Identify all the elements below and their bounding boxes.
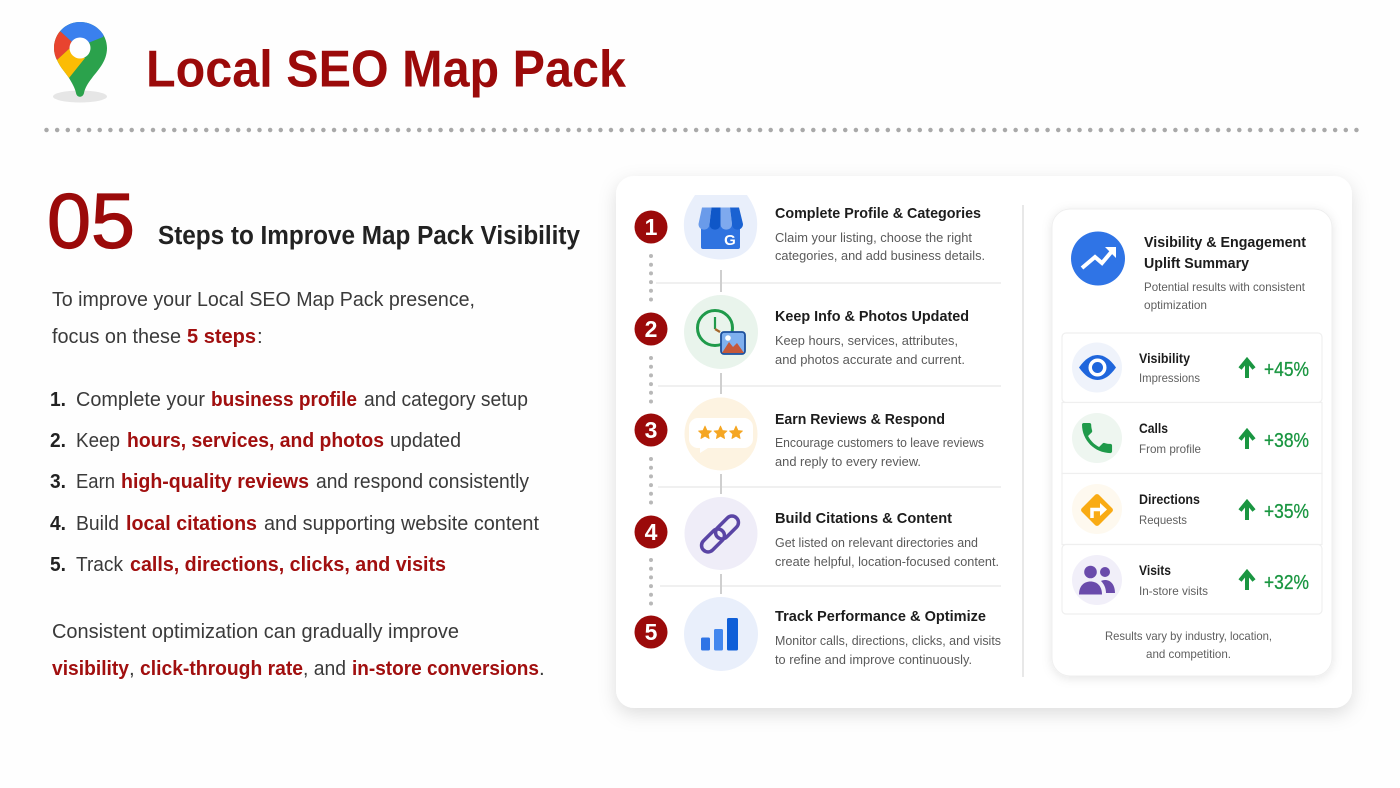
text block: introduction: 5 steps [187, 325, 256, 348]
row: directions: Requests [1139, 513, 1187, 527]
step 2 text: and photos accurate and current. [775, 352, 965, 367]
text block: introduction: : [257, 325, 263, 348]
title: Local SEO Map Pack [146, 40, 626, 98]
row: calls [1062, 402, 1322, 474]
footnote: Results vary by industry, location, [1105, 629, 1272, 643]
step 5 text [775, 608, 1001, 667]
text block: closing statement: , [129, 657, 135, 680]
list: five steps: high-quality reviews [121, 470, 309, 493]
row: visibility [1062, 333, 1322, 402]
list: five steps: calls, directions, clicks, and visits [130, 553, 446, 576]
list: five steps [50, 388, 539, 576]
number badge 3: 3 [645, 417, 657, 443]
step 2 text: Keep Info & Photos Updated [775, 308, 969, 325]
text block: closing statement: , and [303, 657, 346, 680]
step 3: earn reviews [634, 398, 984, 470]
text block: closing statement: . [539, 657, 545, 680]
text block: introduction: focus on these [52, 325, 181, 348]
list: five steps: 5. [50, 553, 66, 576]
text block: closing statement: in-store conversions [352, 657, 539, 680]
heading: 05 steps: 05 [47, 176, 135, 264]
text block: closing statement: click-through rate [140, 657, 303, 680]
list: five steps: business profile [211, 388, 357, 411]
text block: closing statement: Consistent optimization can gradually improve [52, 620, 459, 643]
step 4 text: create helpful, location-focused content. [775, 554, 999, 569]
number badge 5 [634, 616, 668, 648]
step 4 text [775, 510, 999, 569]
list: five steps: and category setup [364, 388, 528, 411]
number badge 4: 4 [645, 519, 658, 545]
number badge 3 [634, 414, 668, 446]
number badge 2 [634, 312, 668, 346]
row: directions: +35% [1264, 501, 1309, 523]
step 5 text: to refine and improve continuously. [775, 652, 972, 667]
number badge 1: 1 [645, 214, 658, 240]
list: five steps: 4. [50, 512, 66, 535]
panel: uplift summary [1052, 209, 1332, 676]
step 1 text: categories, and add business details. [775, 248, 985, 263]
summary heading: Uplift Summary [1144, 255, 1250, 272]
list: five steps: hours, services, and photos [127, 429, 384, 452]
row: calls: +38% [1264, 430, 1309, 452]
heading: 05 steps: Steps to Improve Map Pack Visibility [158, 222, 581, 250]
text block: introduction: To improve your Local SEO Map Pack presence, [52, 288, 475, 311]
row: visits: Visits [1139, 563, 1171, 578]
row: calls: Calls [1139, 421, 1168, 436]
step 3 text: Encourage customers to leave reviews [775, 435, 984, 450]
summary heading: Potential results with consistent [1144, 280, 1306, 294]
icon: map pin logo [53, 22, 107, 102]
step 2 text [775, 308, 969, 367]
step 5 text: Track Performance & Optimize [775, 608, 986, 625]
summary heading: optimization [1144, 298, 1207, 312]
number badge 4 [634, 516, 668, 548]
list: five steps: 1. [50, 388, 66, 411]
icon: storefront [684, 195, 757, 260]
list: five steps: Keep [76, 429, 120, 452]
row: visibility: Visibility [1139, 351, 1190, 366]
icon: clock and photo [684, 295, 758, 369]
step 4 text: Get listed on relevant directories and [775, 535, 978, 550]
row: visits: +32% [1264, 572, 1309, 594]
step 3 text [775, 411, 984, 469]
icon: bar chart [684, 597, 758, 671]
list: five steps: Build [76, 512, 119, 535]
step 1 text: Claim your listing, choose the right [775, 230, 972, 245]
step 2: keep info updated [634, 295, 969, 369]
step 1 text: Complete Profile & Categories [775, 205, 981, 222]
list: five steps: local citations [126, 512, 257, 535]
step 5 text: Monitor calls, directions, clicks, and visits [775, 633, 1001, 648]
list: five steps: and respond consistently [316, 470, 530, 493]
list: five steps: Track [76, 553, 124, 576]
step 1: complete profile [634, 195, 985, 263]
list: five steps: and supporting website content [264, 512, 539, 535]
row: visits [1062, 544, 1322, 614]
row: calls: From profile [1139, 442, 1201, 456]
summary heading [1144, 234, 1306, 312]
row: visibility: +45% [1264, 359, 1309, 381]
number badge 2: 2 [645, 316, 657, 342]
step 3 text: and reply to every review. [775, 454, 921, 469]
number badge 5: 5 [645, 619, 658, 645]
list: five steps: updated [390, 429, 461, 452]
heading: 05 steps [47, 176, 581, 264]
icon: storefront: G [724, 232, 736, 249]
row: visibility: Impressions [1139, 371, 1200, 385]
step 1 text [775, 205, 985, 263]
list: five steps: 2. [50, 429, 66, 452]
step 2 text: Keep hours, services, attributes, [775, 333, 958, 348]
row: directions [1062, 474, 1322, 544]
list: five steps: Earn [76, 470, 115, 493]
step 5: track performance [634, 597, 1001, 671]
footnote [1105, 629, 1272, 661]
text block: closing statement [52, 620, 545, 680]
footnote: and competition. [1146, 647, 1231, 661]
icon: chain link [684, 497, 758, 570]
icon: trend arrow [1071, 232, 1125, 286]
step 4: build citations [634, 497, 999, 570]
icon: review bubble with stars [684, 398, 758, 470]
step 3 text: Earn Reviews & Respond [775, 411, 945, 428]
text block: introduction [52, 288, 475, 348]
row: visits: In-store visits [1139, 584, 1208, 598]
text block: closing statement: visibility [52, 657, 130, 680]
panel: steps and summary card [616, 176, 1352, 708]
list: five steps: 3. [50, 470, 66, 493]
row: directions: Directions [1139, 492, 1200, 507]
list: five steps: Complete your [76, 388, 205, 411]
step 4 text: Build Citations & Content [775, 510, 952, 527]
number badge 1 [634, 210, 668, 244]
summary heading: Visibility & Engagement [1144, 234, 1306, 251]
